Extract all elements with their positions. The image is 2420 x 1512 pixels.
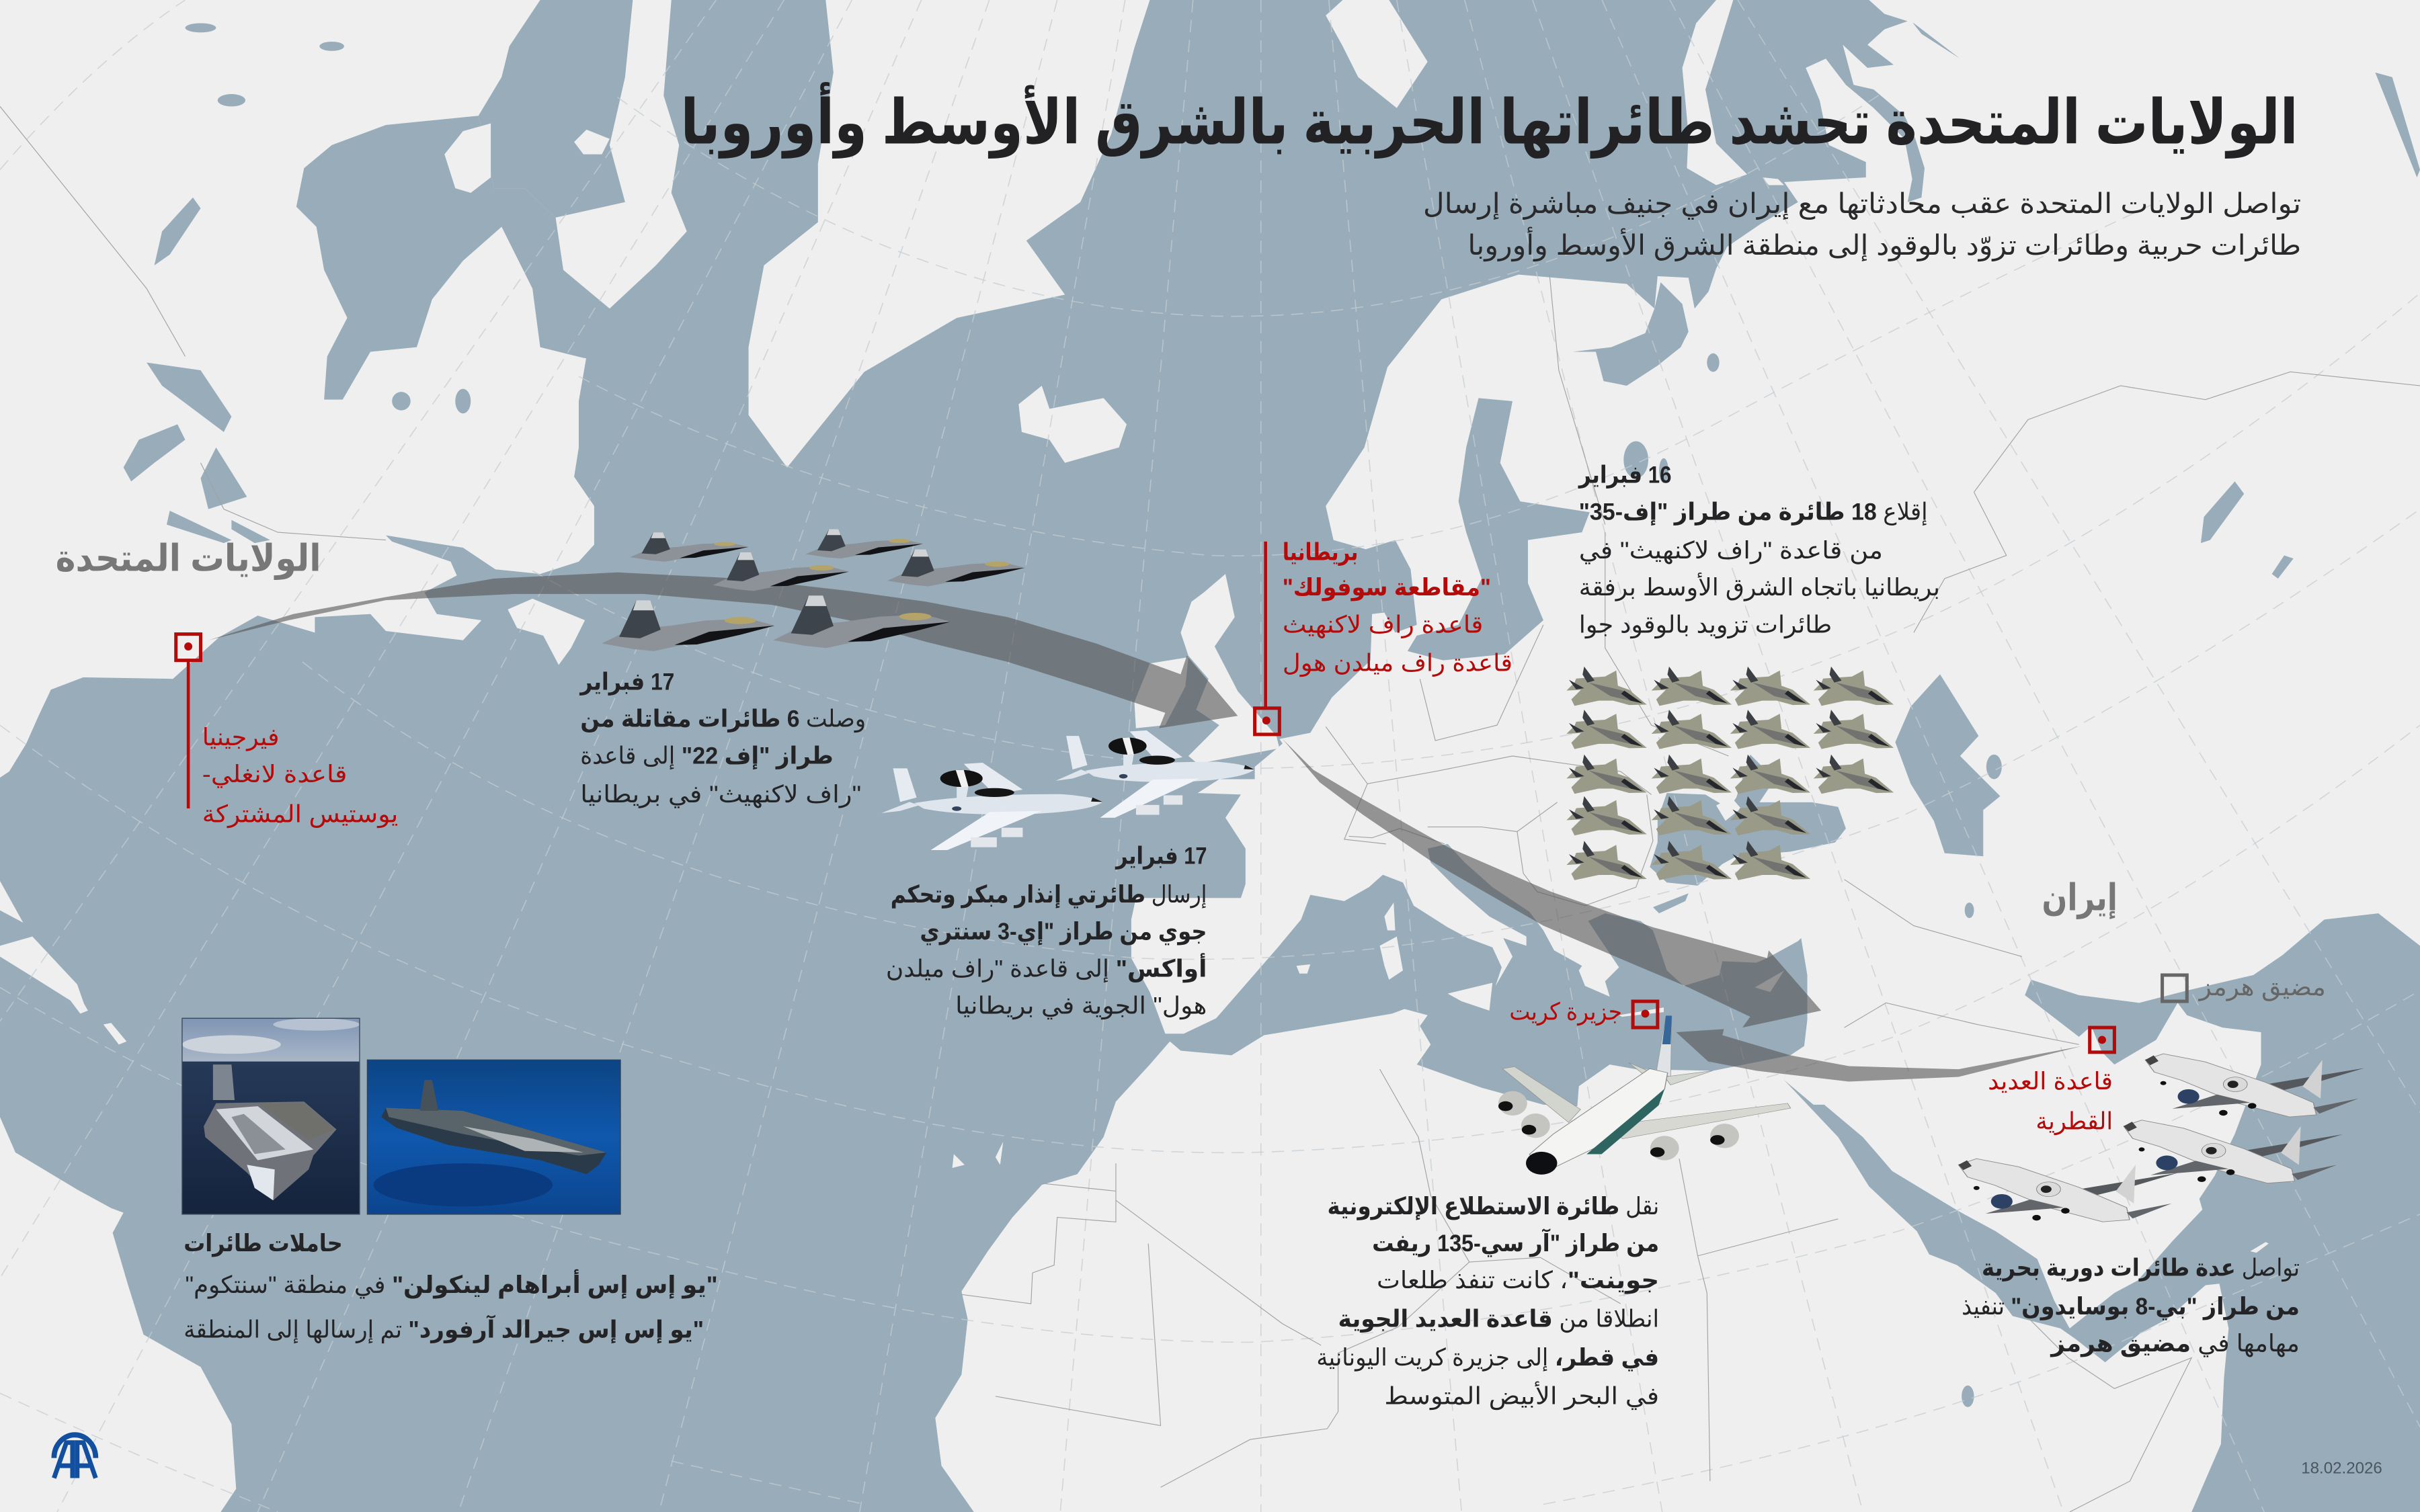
label: Britain bases: بريطانيا	[1283, 538, 1358, 566]
label: Virginia base: فيرجينيا	[202, 724, 280, 751]
marker: Strait of Hormuz	[2163, 975, 2187, 1001]
subtitle: طائرات حربية وطائرات تزوّد بالوقود إلى منطقة الشرق الأوسط وأوروبا	[1467, 226, 2301, 261]
text: F-35 deployment	[1578, 462, 1940, 638]
F-22 fighter formation	[602, 530, 1024, 651]
photo: USS Gerald R. Ford carrier	[182, 1018, 360, 1214]
text: P-8 patrols	[1962, 1255, 2300, 1357]
text: aircraft carriers: "يو إس إس أبراهام لينكولن" في منطقة "سنتكوم"	[186, 1269, 718, 1299]
E-3 Sentry aircraft pair	[881, 730, 1254, 850]
text: P-8 patrols: مهامها في مضيق هرمز	[2050, 1330, 2300, 1357]
label: Al Udeid: القطرية	[2035, 1108, 2113, 1136]
photo: USS Abraham Lincoln carrier	[367, 1060, 620, 1214]
text: E-3 deployment: جوي من طراز "إي-3 سنتري	[920, 918, 1207, 946]
marker: Virginia	[176, 634, 200, 808]
arrow: Al Udeid to Crete	[1676, 1029, 2082, 1081]
arrow: Virginia to Britain	[208, 573, 1238, 728]
text: E-3 deployment: أواكس" إلى قاعدة "راف ميلدن	[886, 952, 1207, 982]
text: E-3 deployment: هول" الجوية في بريطانيا	[955, 992, 1207, 1019]
text: F-35 deployment: بريطانيا باتجاه الشرق الأوسط برفقة	[1579, 573, 1940, 601]
text: F-22 arrival: 17 فبراير	[579, 668, 674, 696]
label: Al Udeid	[1988, 1068, 2113, 1136]
marker: Crete	[1633, 1001, 1658, 1027]
label: Virginia base	[202, 724, 398, 829]
text: F-35 deployment: من قاعدة "راف لاكنهيث" في	[1579, 537, 1883, 564]
P-8 Poseidon aircraft	[1959, 1054, 2364, 1222]
label: Iran: إيران	[2042, 877, 2118, 920]
text: E-3 deployment	[886, 843, 1207, 1019]
label: Virginia base: يوستيس المشتركة	[202, 801, 398, 829]
text: RC-135 relocation	[1316, 1193, 1659, 1410]
subtitle	[1423, 188, 2301, 261]
label: Virginia base: قاعدة لانغلي-	[202, 761, 348, 788]
text: F-35 deployment: إقلاع 18 طائرة من طراز "إف-35"	[1579, 499, 1928, 526]
label: Britain bases	[1283, 538, 1513, 677]
text: aircraft carriers: حاملات طائرات	[184, 1230, 343, 1257]
label: Strait of Hormuz: مضيق هرمز	[2198, 974, 2326, 1001]
text: P-8 patrols: من طراز "بي-8 بوسايدون" تنفيذ	[1962, 1293, 2300, 1320]
text: RC-135 relocation: من طراز "آر سي-135 ريفت	[1372, 1228, 1659, 1257]
arrow: Britain to Middle East	[1283, 739, 1821, 1027]
label: Britain bases: "مقاطعة سوفولك"	[1283, 574, 1491, 601]
text: aircraft carriers: "يو إس إس جيرالد آرفورد" تم إرسالها إلى المنطقة	[184, 1315, 704, 1344]
text: F-35 deployment: طائرات تزويد بالوقود جوا	[1579, 611, 1832, 638]
text: RC-135 relocation: انطلاقا من قاعدة العديد الجوية	[1338, 1305, 1659, 1333]
text: E-3 deployment: إرسال طائرتي إنذار مبكر وتحكم	[891, 881, 1207, 909]
text: F-22 arrival	[579, 668, 866, 808]
label: Al Udeid: قاعدة العديد	[1988, 1068, 2113, 1095]
RC-135 aircraft	[1498, 1016, 1791, 1175]
text: aircraft carriers	[184, 1230, 718, 1344]
subtitle: تواصل الولايات المتحدة عقب محادثاتها مع إيران في جنيف مباشرة إرسال	[1423, 188, 2301, 220]
logo: Anadolu Agency	[54, 1435, 95, 1478]
date stamp: 18.02.2026	[2301, 1460, 2382, 1478]
text: RC-135 relocation: جوينت"، كانت تنفذ طلعات	[1377, 1267, 1659, 1294]
text: F-22 arrival: طراز "إف 22" إلى قاعدة	[580, 742, 834, 769]
marker: Al Udeid	[2090, 1027, 2114, 1052]
F-35 fighter grid	[1566, 667, 1894, 880]
text: F-22 arrival: وصلت 6 طائرات مقاتلة من	[580, 705, 866, 732]
label: Britain bases: قاعدة راف لاكنهيث	[1283, 611, 1483, 638]
text: F-35 deployment: 16 فبراير	[1578, 462, 1671, 489]
label: Crete: جزيرة كريت	[1509, 999, 1622, 1026]
text: RC-135 relocation: نقل طائرة الاستطلاع الإلكترونية	[1327, 1193, 1659, 1220]
label: United States: الولايات المتحدة	[56, 537, 321, 580]
marker: Britain	[1255, 542, 1279, 734]
text: P-8 patrols: تواصل عدة طائرات دورية بحرية	[1982, 1255, 2300, 1282]
text: E-3 deployment: 17 فبراير	[1115, 843, 1207, 870]
text: F-22 arrival: "راف لاكنهيث" في بريطانيا	[580, 781, 861, 808]
text: RC-135 relocation: في قطر، إلى جزيرة كريت اليونانية	[1316, 1344, 1659, 1372]
text: RC-135 relocation: في البحر الأبيض المتوسط	[1384, 1381, 1659, 1410]
label: Britain bases: قاعدة راف ميلدن هول	[1283, 650, 1513, 677]
